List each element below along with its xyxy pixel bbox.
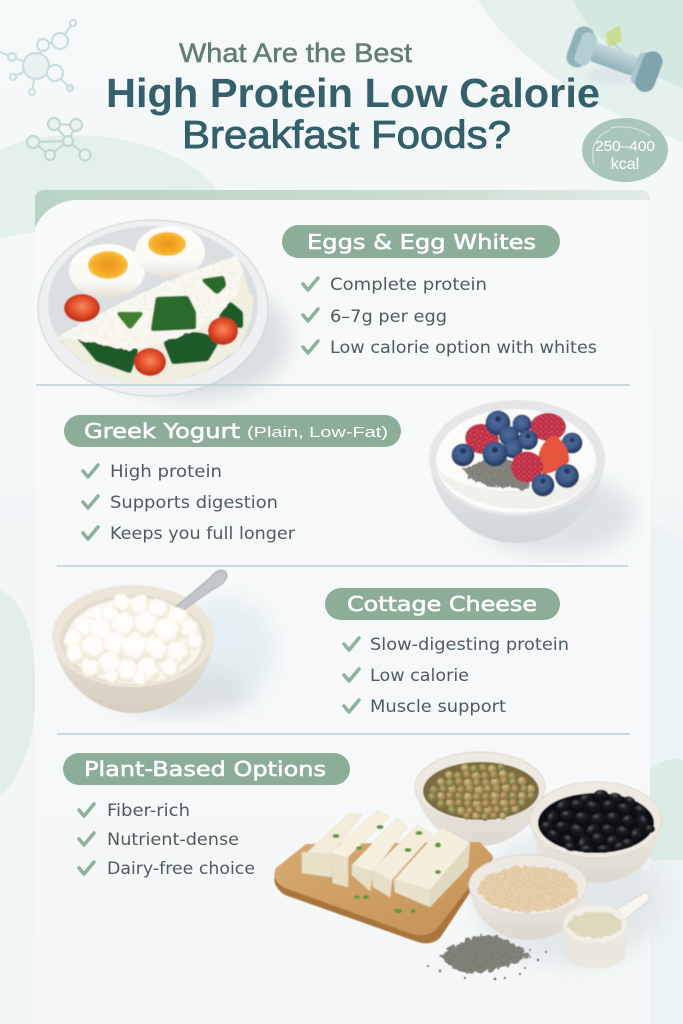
chia seed pile <box>427 935 547 980</box>
heading pill: greek yogurt: (Plain, Low-Fat) <box>247 424 388 441</box>
title <box>106 38 600 157</box>
badge: calorie range <box>582 118 668 182</box>
heading pill: cottage cheese: Cottage Cheese <box>347 592 537 616</box>
checklist: eggs: 6–7g per egg <box>330 307 447 326</box>
icon: dumbbell <box>564 24 665 95</box>
omelette lower layer <box>58 257 253 385</box>
checklist: cottage cheese: Slow-digesting protein <box>370 635 569 654</box>
section: plant-based options <box>63 752 665 980</box>
food group: tofu, legumes, powder, seeds <box>274 752 665 980</box>
scallion garnish <box>332 825 441 913</box>
heading pill: greek yogurt: Greek Yogurt <box>84 419 240 443</box>
omelette top fold <box>57 256 243 350</box>
wooden board <box>274 846 493 943</box>
measuring scoop with seeds <box>563 893 649 968</box>
spinach on top <box>118 277 225 330</box>
checklist: greek yogurt: Supports digestion <box>110 493 278 512</box>
bowl of yogurt with berries <box>429 400 635 555</box>
lentil bowl <box>415 752 545 846</box>
tofu slices <box>302 811 470 907</box>
badge: calorie range: kcal <box>611 156 639 173</box>
checklist: plant-based: Nutrient-dense <box>107 830 239 849</box>
checklist: eggs: Low calorie option with whites <box>330 338 597 357</box>
black bean bowl <box>530 782 662 883</box>
section: greek yogurt <box>64 400 635 555</box>
heading pill: eggs <box>282 225 560 258</box>
icon: molecule lower left <box>27 118 90 160</box>
heading pill: plant-based: Plant-Based Options <box>84 757 326 781</box>
title line 1: What Are the Best <box>179 38 413 68</box>
badge: calorie range: 250–400 <box>595 138 655 155</box>
checklist: eggs: Complete protein <box>330 275 487 294</box>
spinach under fold <box>75 303 242 372</box>
heading pill: plant-based <box>63 753 350 785</box>
checklist: greek yogurt <box>83 462 295 543</box>
icon: molecule upper left <box>0 20 76 95</box>
section: eggs and egg whites <box>38 220 597 400</box>
protein powder bowl <box>469 855 587 940</box>
heading pill: eggs: Eggs & Egg Whites <box>307 230 536 254</box>
heading pill: greek yogurt <box>64 415 401 447</box>
checklist: cottage cheese <box>344 635 569 716</box>
checklist: plant-based: Dairy-free choice <box>107 859 255 878</box>
checklist: plant-based <box>79 801 255 878</box>
bowl of cottage cheese with spoon <box>52 570 275 715</box>
panel: main card <box>35 190 650 1024</box>
section: cottage cheese <box>52 570 569 716</box>
plate of omelette and eggs <box>38 220 290 400</box>
checklist: greek yogurt: High protein <box>110 462 222 481</box>
checklist: cottage cheese: Low calorie <box>370 666 469 685</box>
checklist: eggs <box>303 275 597 357</box>
checklist: cottage cheese: Muscle support <box>370 697 507 716</box>
checklist: plant-based: Fiber-rich <box>107 801 190 820</box>
title line 3: Breakfast Foods? <box>182 114 511 157</box>
checklist: greek yogurt: Keeps you full longer <box>110 524 295 543</box>
heading pill: cottage cheese <box>325 588 560 620</box>
title line 2: High Protein Low Calorie <box>106 70 600 116</box>
